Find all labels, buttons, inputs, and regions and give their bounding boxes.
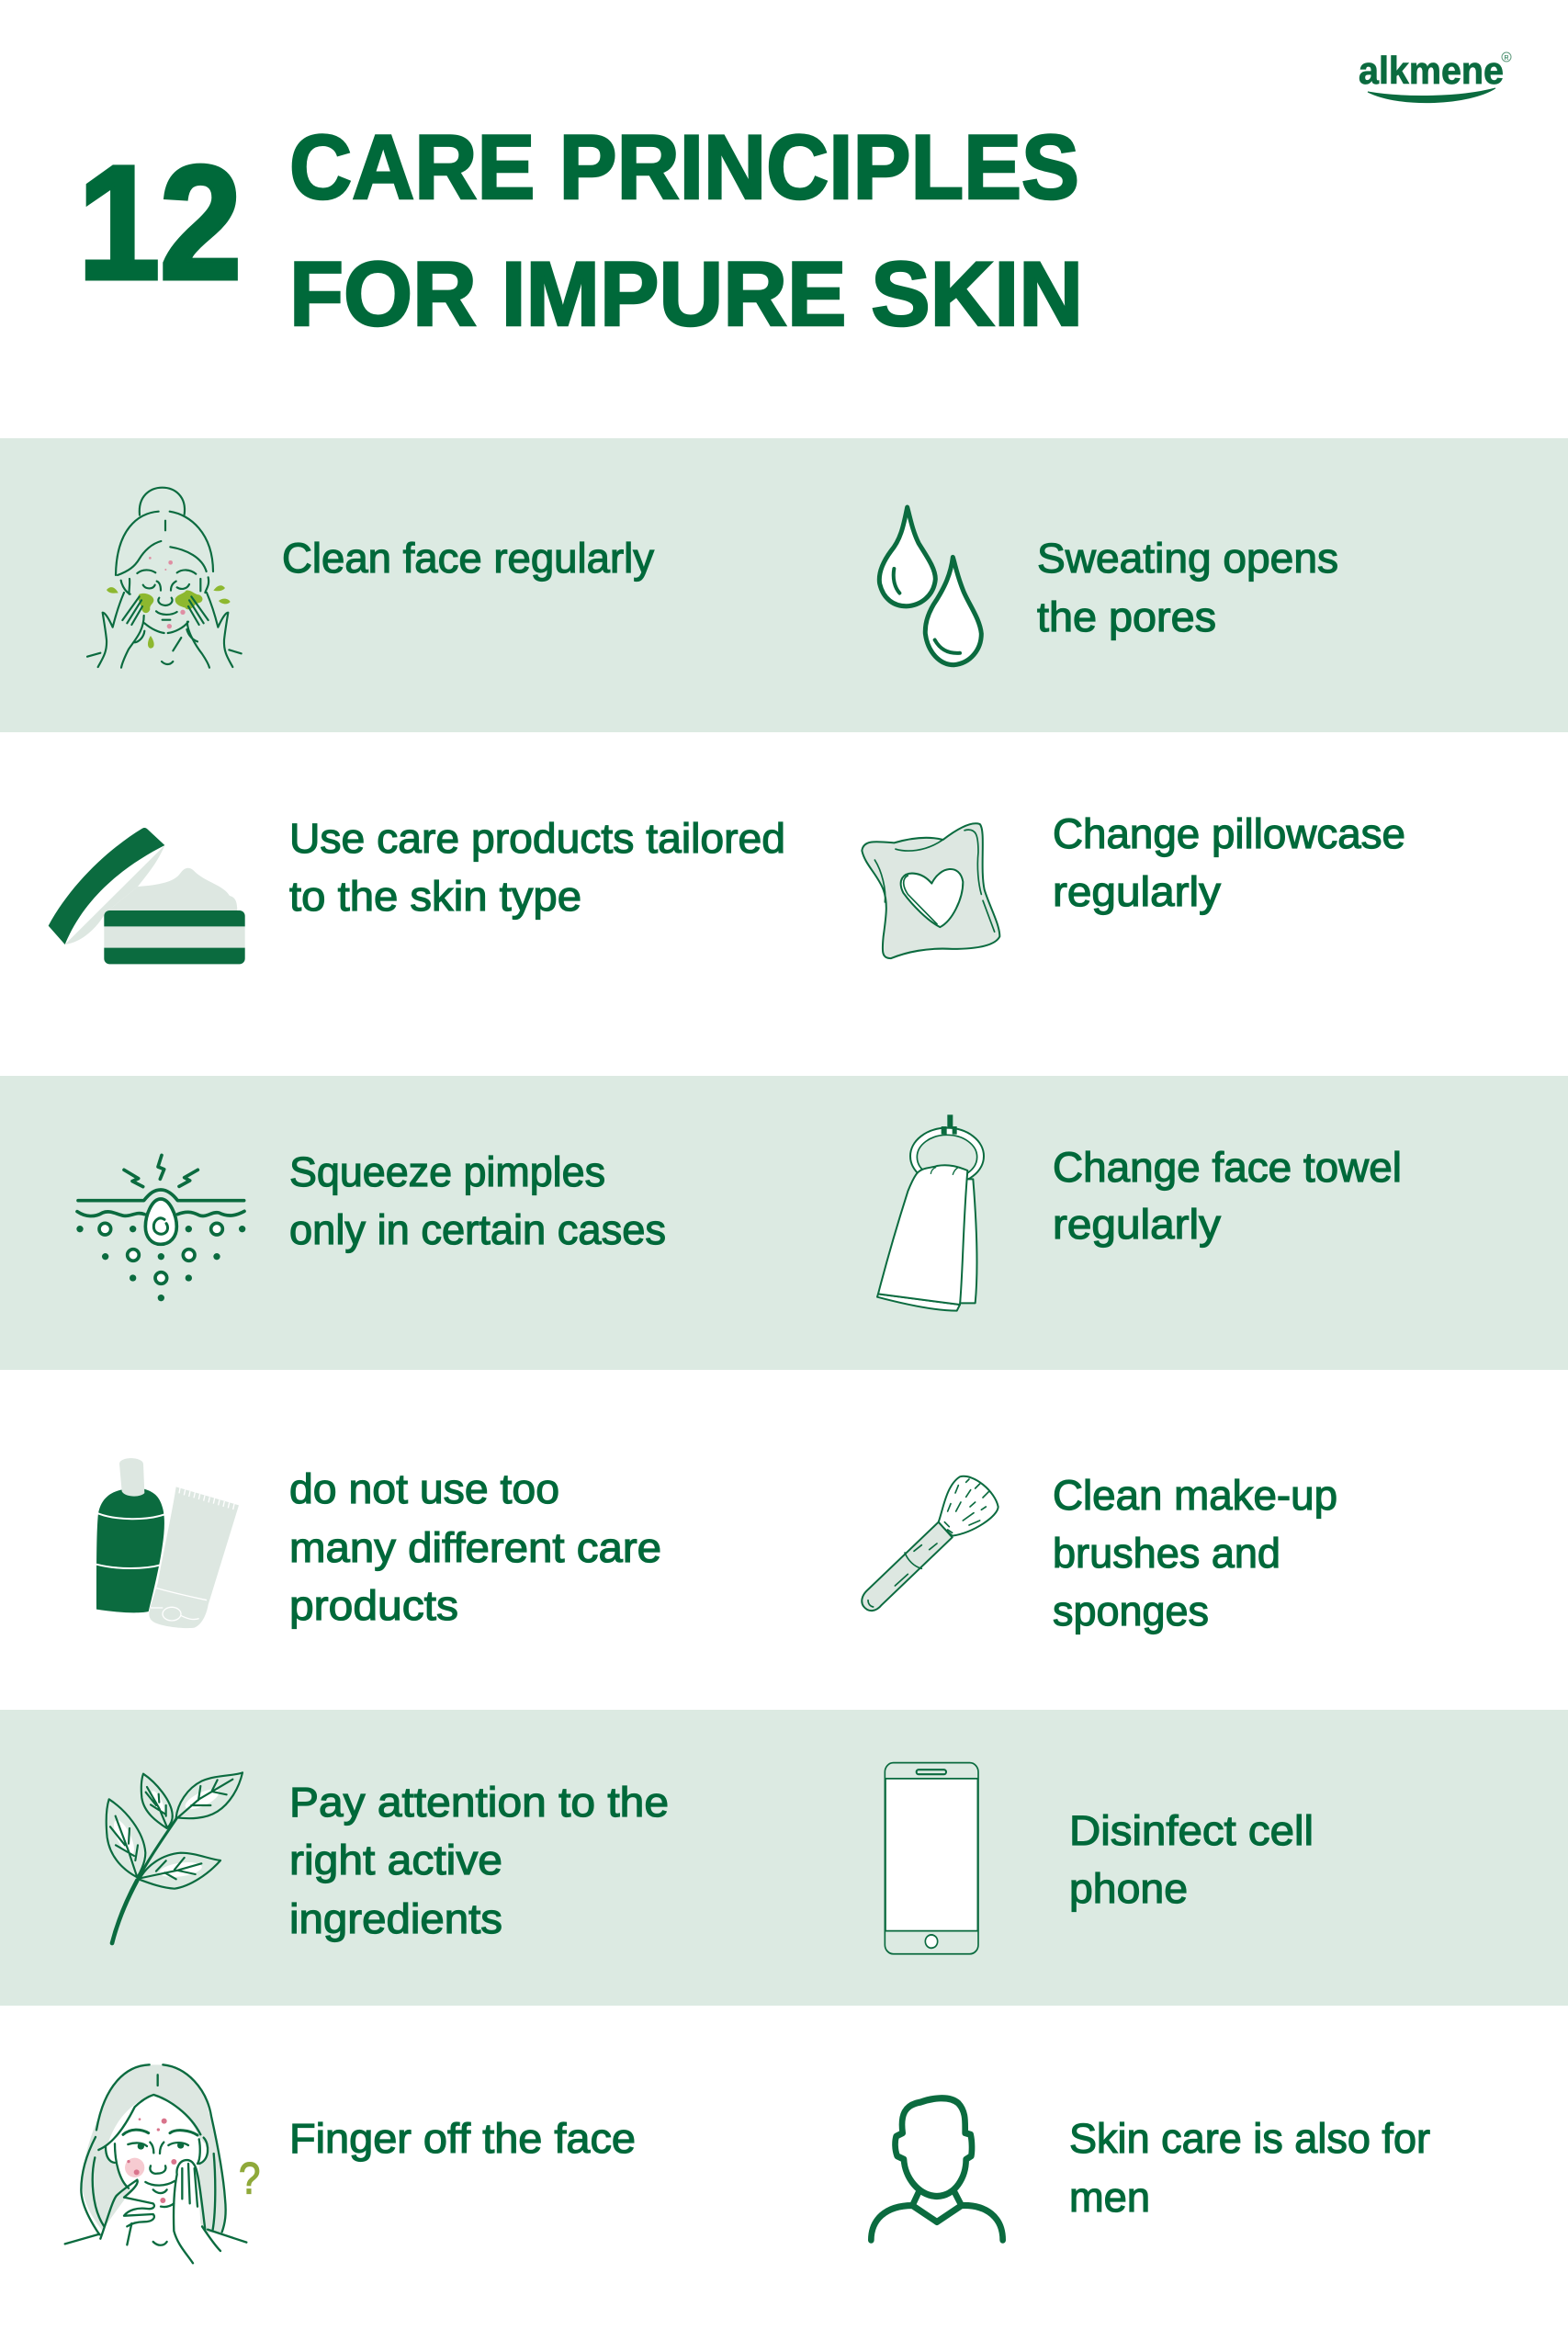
title number: 12: 12 [78,133,242,313]
item: sweating opens the pores [879,507,1338,665]
text: clean face regularly: Clean face regularly [282,535,654,582]
title line 2: FOR IMPURE SKIN [289,243,1083,345]
text: skin care is also for men: Skin care is also for [1069,2115,1430,2162]
item: fingers off the face [65,2064,636,2263]
text: change face towel regularly: Change face towel [1053,1144,1402,1191]
logo: alkmene: alkmene [1359,49,1504,92]
text: change face towel regularly [1053,1144,1402,1248]
text: sweating opens the pores [1037,535,1338,640]
text: pay attention to the right active ingredients: right active [289,1837,502,1883]
icon: question mark: ? [239,2154,260,2204]
text: change pillowcase regularly: regularly [1053,868,1222,915]
text: disinfect cell phone [1069,1807,1314,1912]
text: pay attention to the right active ingredients [289,1779,669,1942]
text: squeeze pimples only in certain cases: Squeeze pimples [289,1148,605,1195]
item: use tailored care products [49,815,785,964]
logo: alkmene: R [1505,55,1509,62]
text: clean make-up brushes and sponges: sponges [1053,1588,1209,1634]
icon: man silhouette [871,2098,1003,2240]
text: clean make-up brushes and sponges: Clean make-up [1053,1472,1337,1519]
icon: woman washing face [87,488,242,668]
icon: pillow with heart [862,823,999,958]
icon: bottle and tube [96,1458,239,1628]
text: clean make-up brushes and sponges [1053,1472,1337,1634]
text: squeeze pimples only in certain cases [289,1148,666,1253]
text: use care products tailored: Use care products tailored [289,815,785,862]
icon: open cream jar [49,828,245,964]
item: clean brushes and sponges [862,1472,1337,1634]
item: not too many products [96,1458,661,1629]
item: change face towel [877,1114,1402,1311]
text: disinfect cell phone: Disinfect cell [1069,1807,1314,1854]
text: sweating opens the pores: the pores [1037,594,1216,640]
text: do not use too many different care products: products [289,1582,458,1629]
band: row 5 background [0,1710,1568,2006]
text: use care products tailored: to the skin type [289,873,581,920]
text: finger off the face: Finger off the face [289,2115,636,2162]
text: change pillowcase regularly [1053,810,1405,915]
title line 1: CARE PRINCIPLES [289,116,1079,218]
icon: smartphone [885,1763,978,1954]
item: squeeze pimples [76,1148,666,1301]
text: pay attention to the right active ingredients: Pay attention to the [289,1779,669,1826]
item: disinfect cell phone [885,1763,1314,1954]
icon: make-up brush [862,1476,998,1611]
text: use care products tailored [289,815,785,920]
text: squeeze pimples only in certain cases: only in certain cases [289,1206,666,1253]
text: do not use too many different care products [289,1465,661,1629]
item: right active ingredients [107,1772,669,1943]
text: change pillowcase regularly: Change pillowcase [1053,810,1405,857]
title [78,116,1083,345]
icon: towel on ring [877,1114,984,1311]
text: do not use too many different care products: do not use too [289,1465,559,1512]
text: change face towel regularly: regularly [1053,1201,1222,1248]
text: skin care is also for men: men [1069,2174,1150,2221]
item: clean face regularly [87,488,654,668]
band: row 3 background [0,1076,1568,1370]
icon: woman touching face [65,2064,260,2263]
band: row 1 background [0,438,1568,732]
text: pay attention to the right active ingredients: ingredients [289,1895,502,1942]
text: disinfect cell phone: phone [1069,1865,1188,1912]
item: skin care for men [871,2098,1430,2240]
text: clean make-up brushes and sponges: brushes and [1053,1530,1280,1577]
text: do not use too many different care products: many different care [289,1524,661,1571]
icon: leaf branch [107,1772,243,1943]
item: change pillowcase [862,810,1405,958]
text: sweating opens the pores: Sweating opens [1037,535,1338,582]
icon: pimple under skin [76,1155,245,1301]
text: skin care is also for men [1069,2115,1430,2221]
icon: sweat drops [879,507,981,665]
